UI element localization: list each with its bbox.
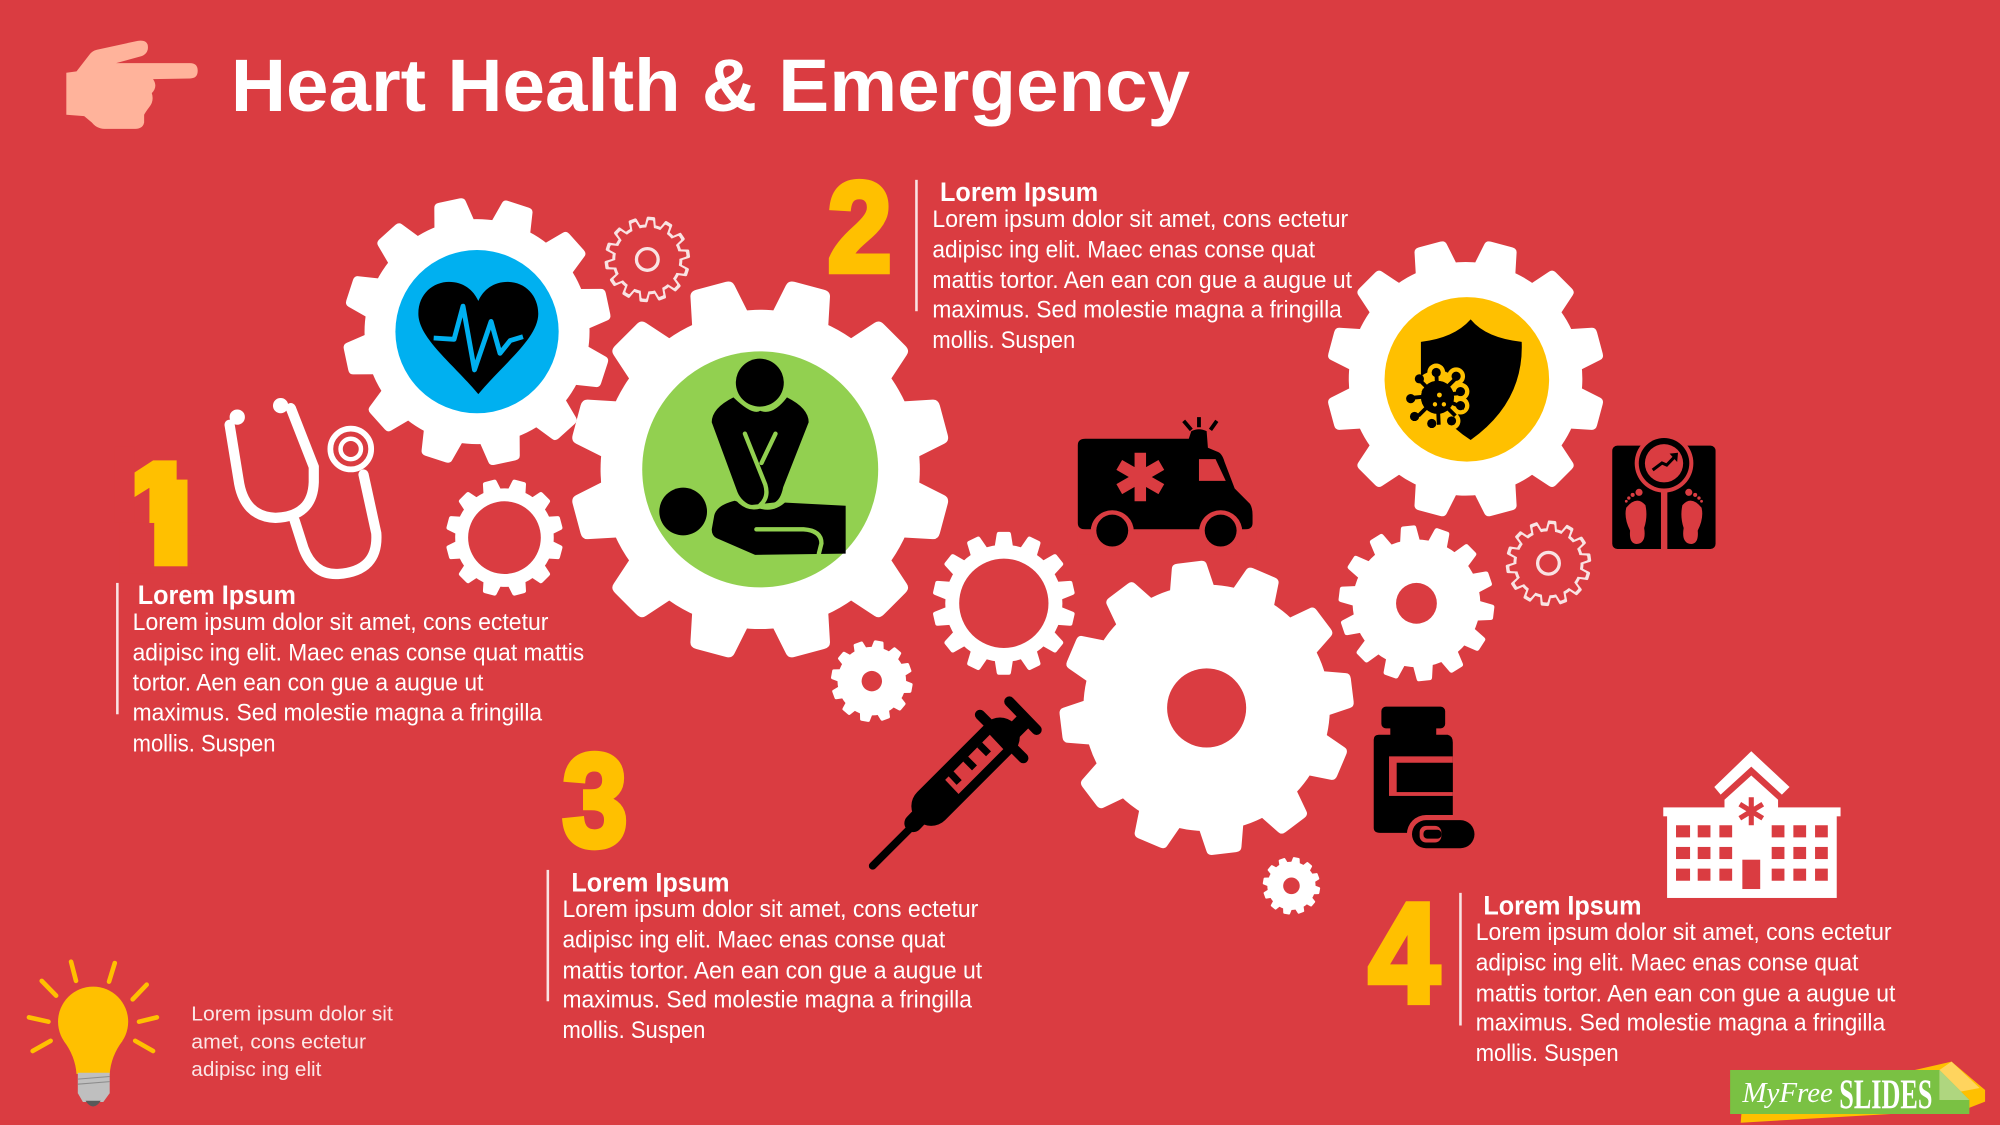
- body line 4: maximus. Sed molestie magna a fringilla: [133, 700, 543, 726]
- body line 3: mattis tortor. Aen ean con gue a augue ut: [1476, 980, 1896, 1006]
- body line 2: adipisc ing elit. Maec enas conse quat: [932, 237, 1315, 263]
- heading: Lorem Ipsum: [940, 177, 1098, 207]
- tip line 1: Lorem ipsum dolor sit: [191, 1003, 393, 1025]
- body line 3: mattis tortor. Aen ean con gue a augue ut: [562, 957, 983, 983]
- gear body: [318, 173, 636, 490]
- body line 2: adipisc ing elit. Maec enas conse quat: [562, 927, 946, 953]
- logo: MyFreeSlides: [1730, 1062, 1985, 1123]
- body line 2: adipisc ing elit. Maec enas conse quat mattis: [133, 640, 584, 666]
- outline gear right: [1502, 517, 1595, 610]
- body line 1: Lorem ipsum dolor sit amet, cons ectetur: [932, 206, 1348, 232]
- yellow disc: [1385, 297, 1549, 462]
- body line 4: maximus. Sed molestie magna a fringilla: [1476, 1010, 1886, 1036]
- gear: green CPR: [527, 237, 993, 702]
- body line 1: Lorem ipsum dolor sit amet, cons ectetur: [1476, 919, 1892, 945]
- gear body: [1295, 209, 1636, 549]
- heading: Lorem Ipsum: [1483, 891, 1642, 921]
- number 3: 3: [562, 727, 628, 874]
- logo text bold: SLIDES: [1839, 1071, 1932, 1118]
- ring gear left: [433, 466, 576, 609]
- icon: rescuer: [712, 397, 809, 505]
- heading: Lorem Ipsum: [571, 868, 730, 898]
- text block 2: [915, 177, 1352, 353]
- body line 1: Lorem ipsum dolor sit amet, cons ectetur: [562, 896, 978, 922]
- heading: Lorem Ipsum: [138, 580, 296, 610]
- body line 4: maximus. Sed molestie magna a fringilla: [562, 987, 973, 1013]
- solid gear right: [1331, 518, 1502, 689]
- tip line 3: adipisc ing elit: [191, 1059, 322, 1081]
- divider: [1459, 893, 1462, 1026]
- body line 1: Lorem ipsum dolor sit amet, cons ectetur: [133, 609, 549, 635]
- outline gear top: [601, 213, 694, 306]
- text block 3: [547, 868, 983, 1043]
- icon: pointing hand: [66, 41, 198, 129]
- text block 1: [116, 580, 584, 756]
- icon: hospital: [1663, 751, 1841, 898]
- gear: yellow shield: [1295, 209, 1636, 549]
- icon: heart: [418, 282, 538, 394]
- body line 3: tortor. Aen ean con gue a augue ut: [133, 670, 484, 696]
- number 2: 2: [828, 157, 892, 299]
- title: Heart Health & Emergency: [231, 44, 1190, 127]
- body line 5: mollis. Suspen: [1476, 1040, 1619, 1066]
- number 4: 4: [1369, 875, 1439, 1033]
- icon: stethoscope: [230, 401, 376, 574]
- ring gear centre: [932, 532, 1076, 675]
- divider: [547, 870, 549, 1001]
- body line 5: mollis. Suspen: [932, 327, 1075, 353]
- green disc: [642, 351, 878, 587]
- divider: [116, 583, 119, 714]
- body line 5: mollis. Suspen: [133, 730, 276, 756]
- body line 2: adipisc ing elit. Maec enas conse quat: [1476, 950, 1859, 976]
- icon: ambulance: [1078, 417, 1256, 555]
- body line 4: maximus. Sed molestie magna a fringilla: [932, 297, 1343, 323]
- icon: weight scale: [1612, 434, 1716, 550]
- logo text: MyFree: [1741, 1078, 1833, 1109]
- text block 4: [1459, 891, 1896, 1066]
- icon: shield: [1421, 319, 1522, 440]
- feet: [1626, 501, 1646, 544]
- body line 5: mollis. Suspen: [562, 1017, 705, 1043]
- icon: syringe: [873, 702, 1037, 866]
- gear: blue heart: [318, 173, 636, 490]
- blue disc: [395, 250, 559, 413]
- number 1: 1: [120, 434, 199, 593]
- arm highlights: [737, 434, 821, 554]
- tip text: [191, 1003, 393, 1081]
- tip line 2: amet, cons ectetur: [191, 1031, 366, 1053]
- big solid gear: [1043, 544, 1370, 871]
- icon: virus: [1406, 364, 1469, 430]
- icon: light bulb: [29, 962, 157, 1107]
- body line 3: mattis tortor. Aen ean con gue a augue ut: [932, 267, 1352, 293]
- heartbeat line: [434, 306, 523, 370]
- icon: patient: [659, 488, 707, 535]
- small gear bottom: [1258, 853, 1325, 919]
- small gear centre: [825, 634, 919, 728]
- gear body: [527, 237, 993, 702]
- icon: medicine bottle: [1374, 707, 1478, 853]
- divider: [915, 180, 918, 311]
